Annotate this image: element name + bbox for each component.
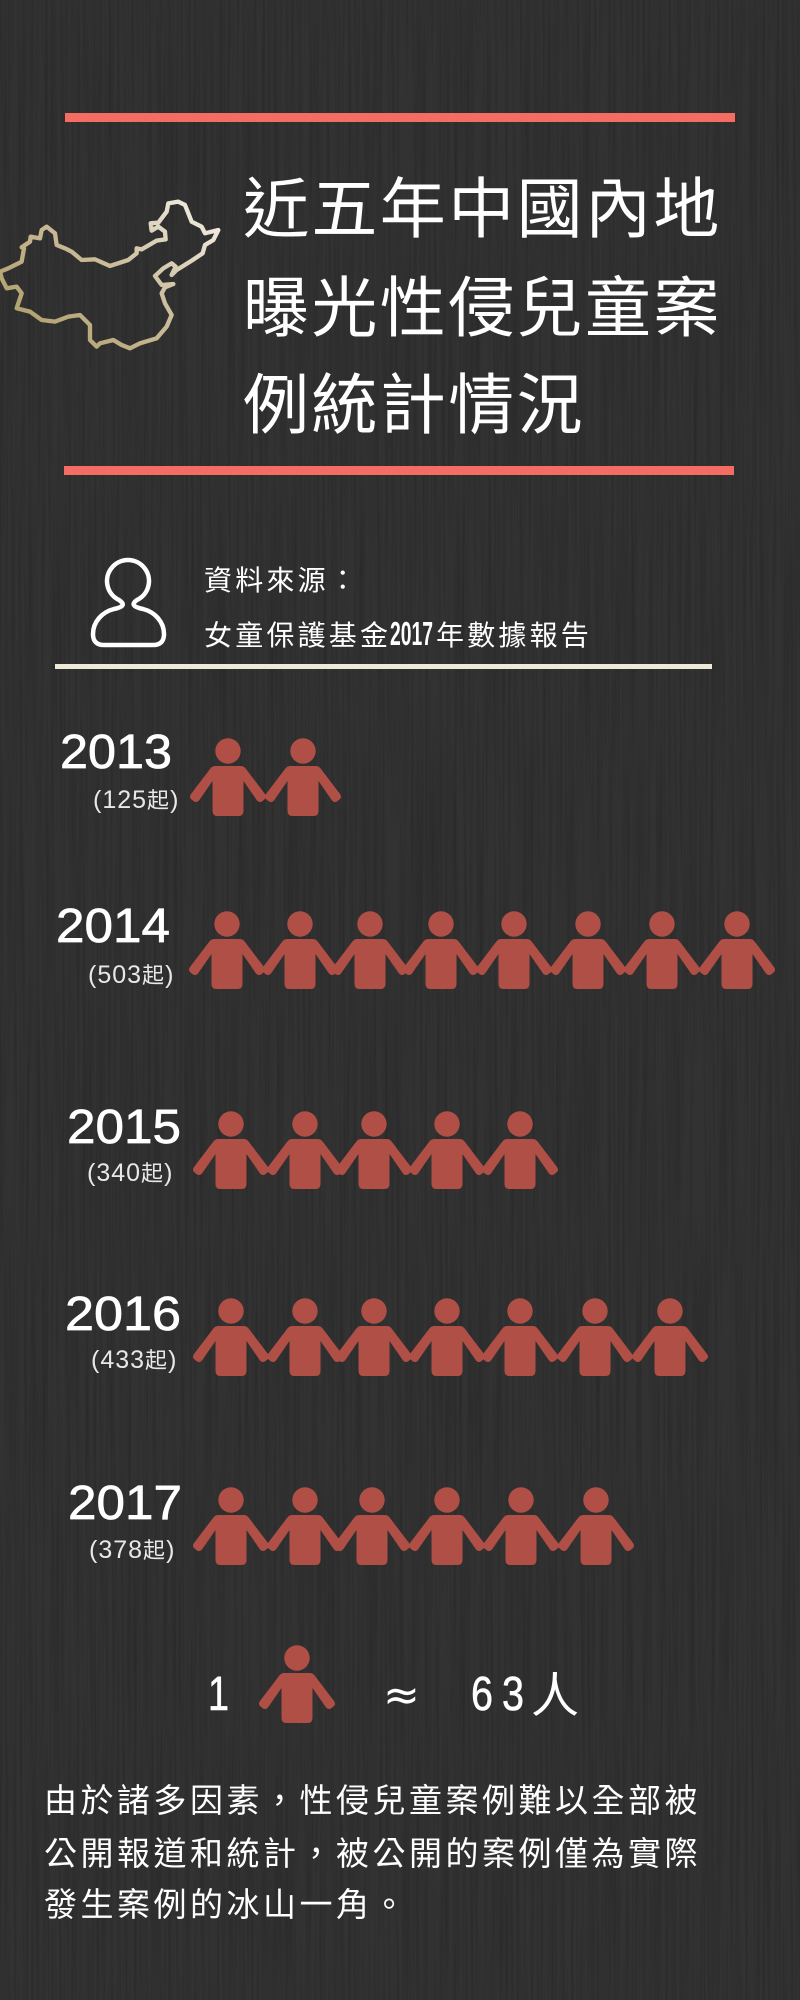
icon: person outline: [93, 560, 164, 645]
row 2014: 2014: [56, 900, 170, 953]
row 2015: (340起): [87, 1159, 173, 1187]
source text: [204, 565, 592, 652]
title: [243, 172, 722, 442]
legend: [208, 1645, 579, 1723]
legend: 人: [531, 1670, 579, 1723]
title: 例統計情況: [243, 368, 585, 442]
title: 曝光性侵兒童案: [243, 271, 722, 345]
top rule: [65, 113, 735, 122]
row 2013: 2013: [60, 726, 172, 779]
row 2016: [65, 1288, 708, 1376]
source text: 2017: [390, 615, 433, 652]
legend: 6: [471, 1668, 493, 1721]
divider: [55, 664, 712, 669]
row 2013: (125起): [93, 786, 179, 814]
row 2017: (378起): [89, 1536, 175, 1564]
closing paragraph: 由於諸多因素，性侵兒童案例難以全部被: [44, 1774, 701, 1822]
legend: 1: [208, 1668, 229, 1721]
row 2014: (503起): [88, 961, 174, 989]
row 2015: 2015: [67, 1101, 181, 1154]
closing paragraph: 發生案例的冰山一角。: [44, 1878, 409, 1926]
row 2017: [68, 1477, 634, 1565]
icon: China map outline: [0, 202, 218, 348]
legend: 3: [502, 1668, 524, 1721]
source text: 資料來源：: [204, 565, 360, 596]
bottom title rule: [64, 466, 734, 475]
row 2017: 2017: [68, 1477, 182, 1530]
legend: ≈: [383, 1670, 420, 1721]
row 2014: [56, 900, 775, 989]
row 2013: [60, 726, 341, 816]
closing paragraph: 公開報道和統計，被公開的案例僅為實際: [44, 1827, 701, 1875]
title: 近五年中國內地: [243, 172, 722, 246]
row 2015: [67, 1101, 558, 1189]
source text: 女童保護基金: [204, 620, 391, 651]
row 2016: 2016: [65, 1288, 181, 1341]
closing paragraph: [44, 1774, 701, 1926]
row 2016: (433起): [91, 1346, 177, 1374]
source text: 年數據報告: [436, 620, 592, 651]
